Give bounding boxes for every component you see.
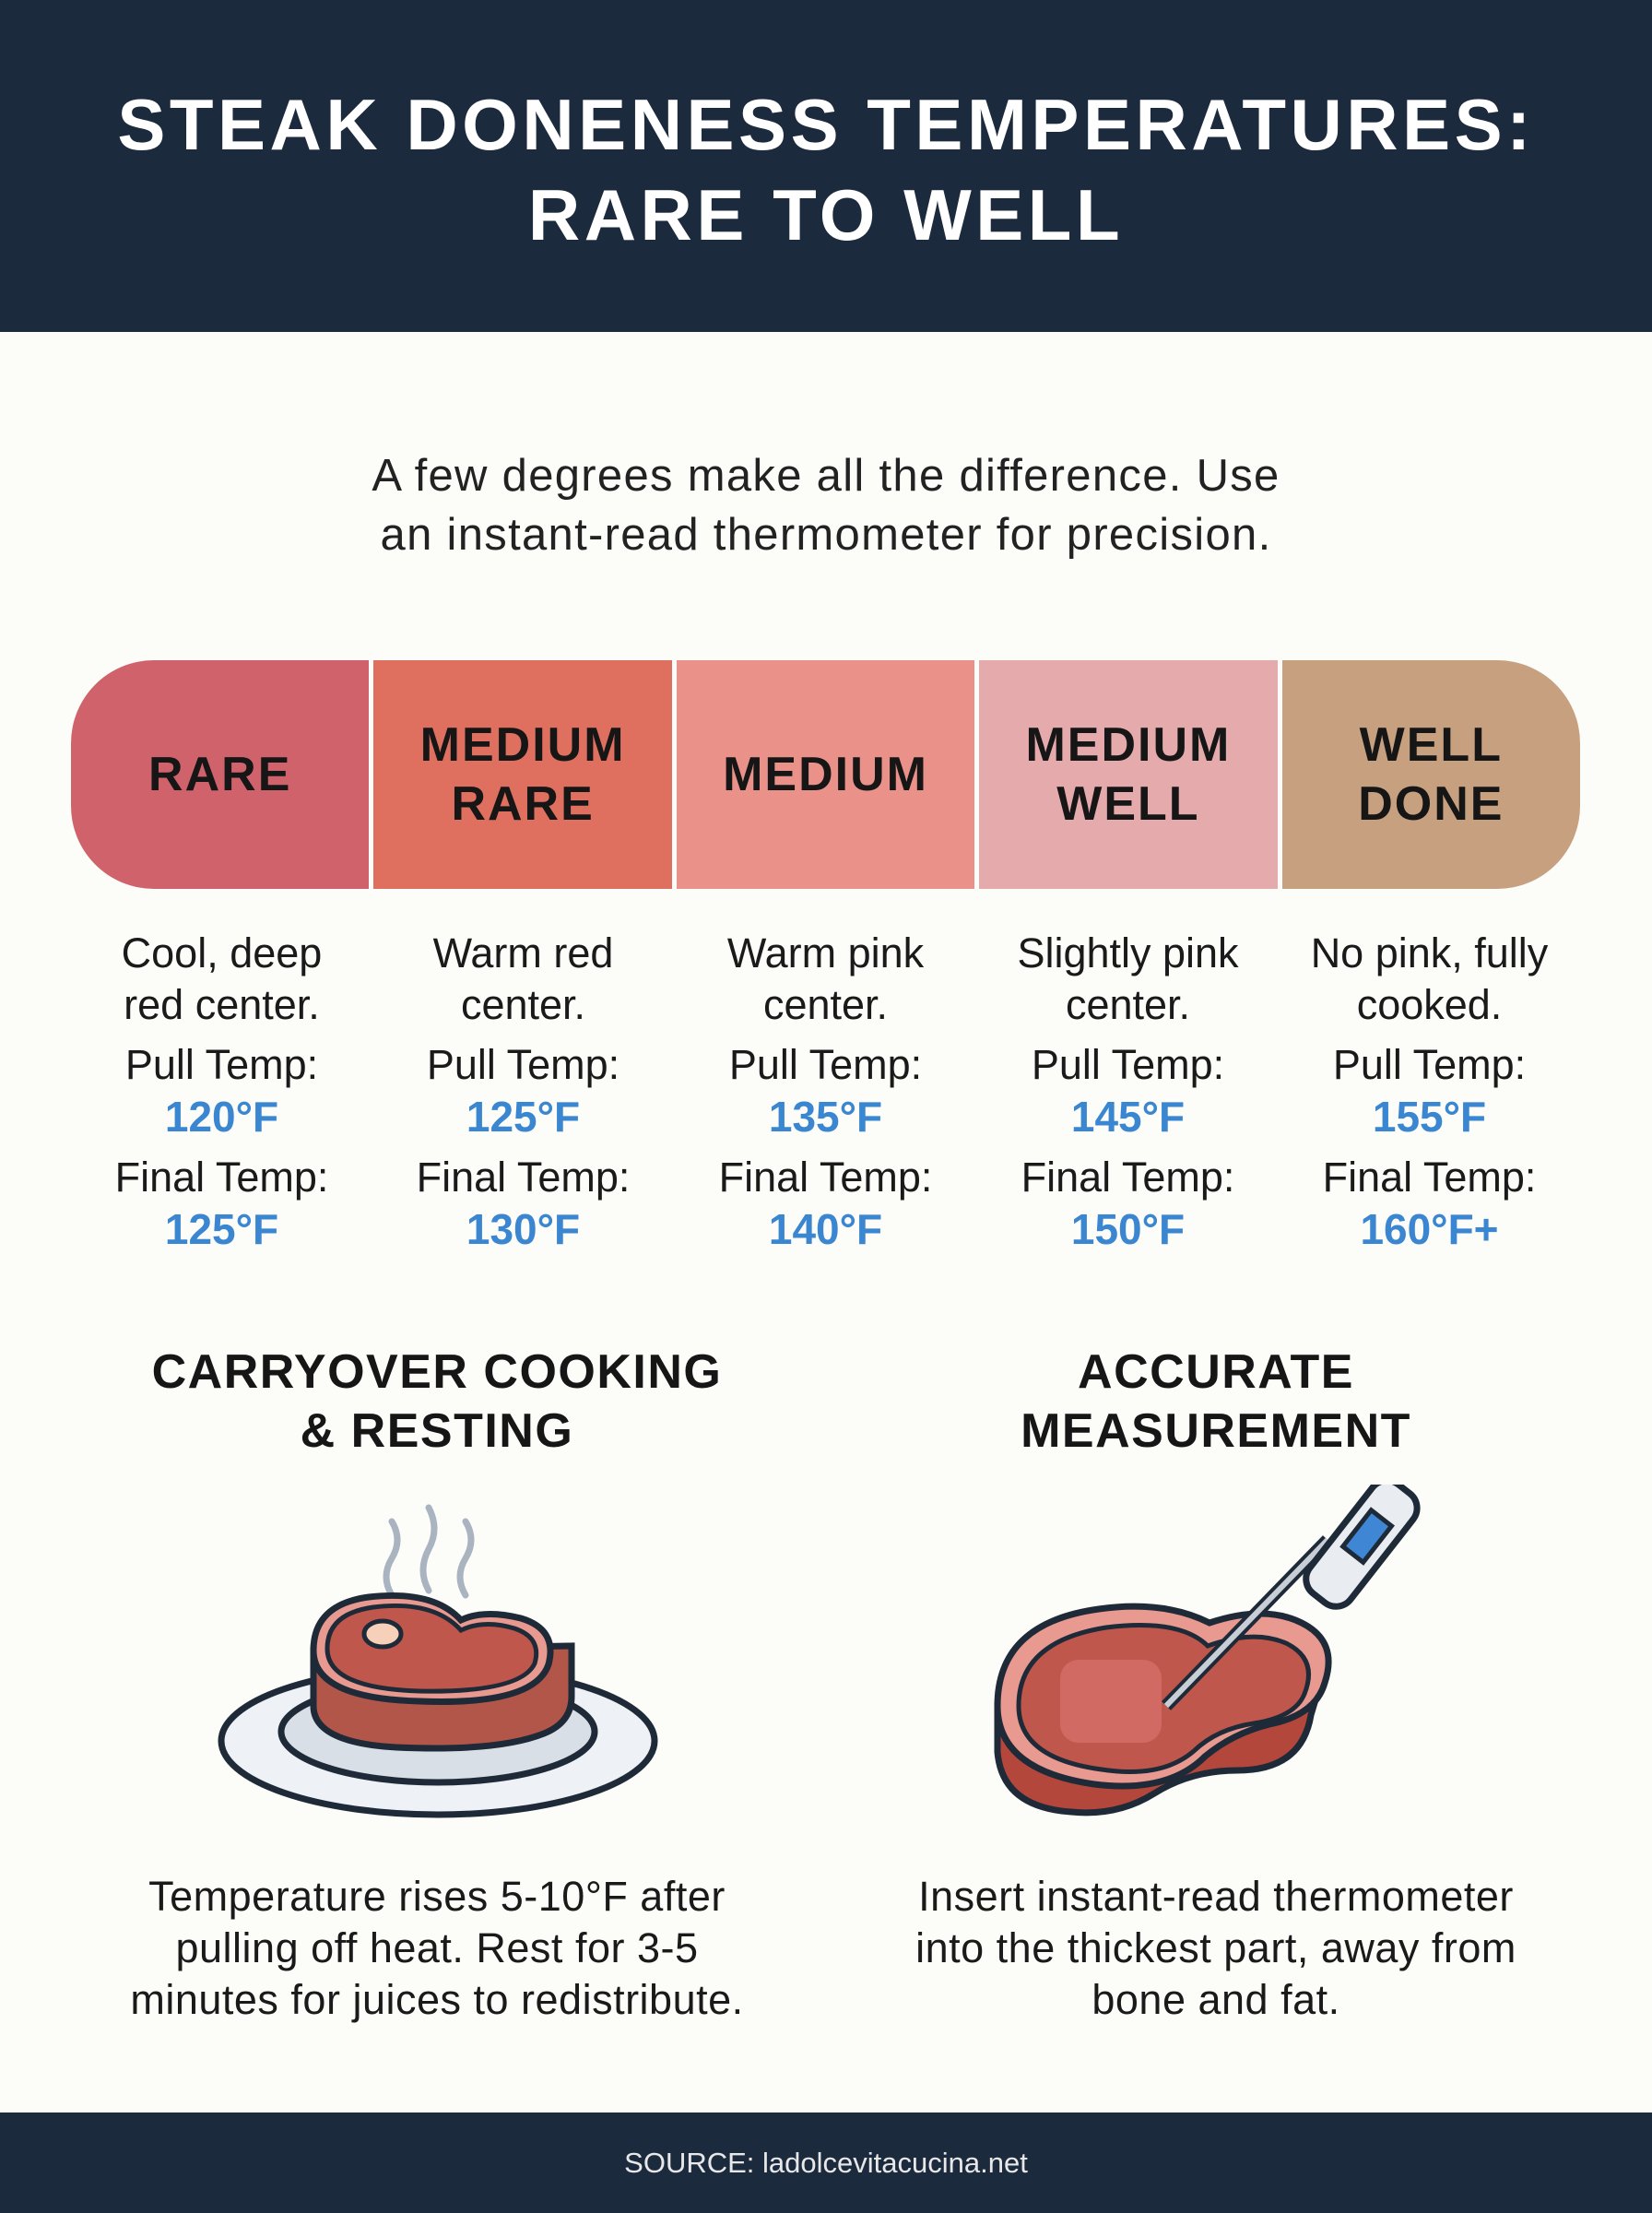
segment: medium well [979, 660, 1278, 889]
caption: carryover: pulling off heat. Rest for 3-5 [175, 1924, 699, 1971]
column: well done: Final Temp: [1323, 1154, 1536, 1201]
column: medium well: center. [1066, 981, 1190, 1028]
footer source [0, 2112, 1652, 2213]
footer source: SOURCE: ladolcevitacucina.net [624, 2147, 1028, 2179]
subtitle [372, 451, 1280, 560]
segment: medium [677, 660, 974, 889]
column: medium: Warm pink [727, 929, 924, 976]
segment: rare: RARE [148, 748, 291, 801]
column: medium rare: Warm red [433, 929, 613, 976]
column: medium rare: center. [461, 981, 585, 1028]
segment: rare [71, 660, 369, 889]
column: medium well: Pull Temp: [1032, 1041, 1224, 1088]
column: medium well: 150°F [1071, 1205, 1185, 1253]
icon: resting steak on plate [218, 1505, 658, 1818]
doneness bar [71, 660, 1580, 889]
segment: well done: DONE [1358, 777, 1504, 831]
column: medium rare: Pull Temp: [427, 1041, 620, 1088]
column: medium: center. [763, 981, 888, 1028]
caption: measurement [915, 1873, 1516, 2023]
column: medium: Pull Temp: [729, 1041, 922, 1088]
heading: measurement: MEASUREMENT [1021, 1404, 1411, 1458]
heading: carryover [152, 1345, 722, 1458]
caption: measurement: Insert instant-read thermometer [918, 1873, 1514, 1920]
column: rare: 120°F [165, 1093, 278, 1141]
column: medium: 135°F [769, 1093, 882, 1141]
heading: carryover: CARRYOVER COOKING [152, 1345, 722, 1399]
heading: measurement [1021, 1345, 1411, 1458]
title: STEAK DONENESS TEMPERATURES: [117, 84, 1535, 165]
column: rare [115, 929, 328, 1253]
column: medium: Final Temp: [719, 1154, 932, 1201]
column: well done: No pink, fully [1311, 929, 1548, 976]
title: RARE TO WELL [528, 174, 1124, 255]
column: medium well [1017, 929, 1239, 1253]
segment: medium well: MEDIUM [1025, 718, 1231, 772]
caption: carryover: minutes for juices to redistribute. [130, 1976, 744, 2023]
title [0, 0, 1652, 332]
column: rare: Final Temp: [115, 1154, 328, 1201]
segment: well done: WELL [1360, 718, 1503, 772]
column: well done: Pull Temp: [1333, 1041, 1526, 1088]
heading: carryover: & RESTING [301, 1404, 573, 1458]
segment: medium rare [373, 660, 672, 889]
column: well done: cooked. [1357, 981, 1502, 1028]
column: rare: Cool, deep [122, 929, 322, 976]
subtitle: an instant-read thermometer for precision. [381, 510, 1271, 560]
caption: measurement: into the thickest part, away from [915, 1924, 1516, 1971]
caption: carryover: Temperature rises 5-10°F after [148, 1873, 726, 1920]
column: medium rare [417, 929, 630, 1253]
column: medium rare: 130°F [466, 1205, 580, 1253]
column: rare: red center. [124, 981, 320, 1028]
column: medium well: Final Temp: [1021, 1154, 1234, 1201]
column: well done: 155°F [1373, 1093, 1486, 1141]
column: medium well: 145°F [1071, 1093, 1185, 1141]
caption: measurement: bone and fat. [1092, 1976, 1340, 2023]
segment: medium rare: RARE [451, 777, 595, 831]
column: medium rare: Final Temp: [417, 1154, 630, 1201]
segment: medium: MEDIUM [723, 748, 928, 801]
caption: carryover [130, 1873, 744, 2023]
segment: well done [1282, 660, 1580, 889]
column: well done: 160°F+ [1360, 1205, 1499, 1253]
column: medium well: Slightly pink [1017, 929, 1239, 976]
column: medium: 140°F [769, 1205, 882, 1253]
column: medium rare: 125°F [466, 1093, 580, 1141]
column: well done [1311, 929, 1549, 1253]
column: rare: 125°F [165, 1205, 278, 1253]
subtitle: A few degrees make all the difference. Use [372, 451, 1280, 501]
column: rare: Pull Temp: [125, 1041, 318, 1088]
segment: medium well: WELL [1056, 777, 1200, 831]
segment: medium rare: MEDIUM [420, 718, 626, 772]
column: medium [719, 929, 932, 1253]
heading: measurement: ACCURATE [1078, 1345, 1354, 1399]
icon: steak with thermometer [994, 1485, 1421, 1817]
